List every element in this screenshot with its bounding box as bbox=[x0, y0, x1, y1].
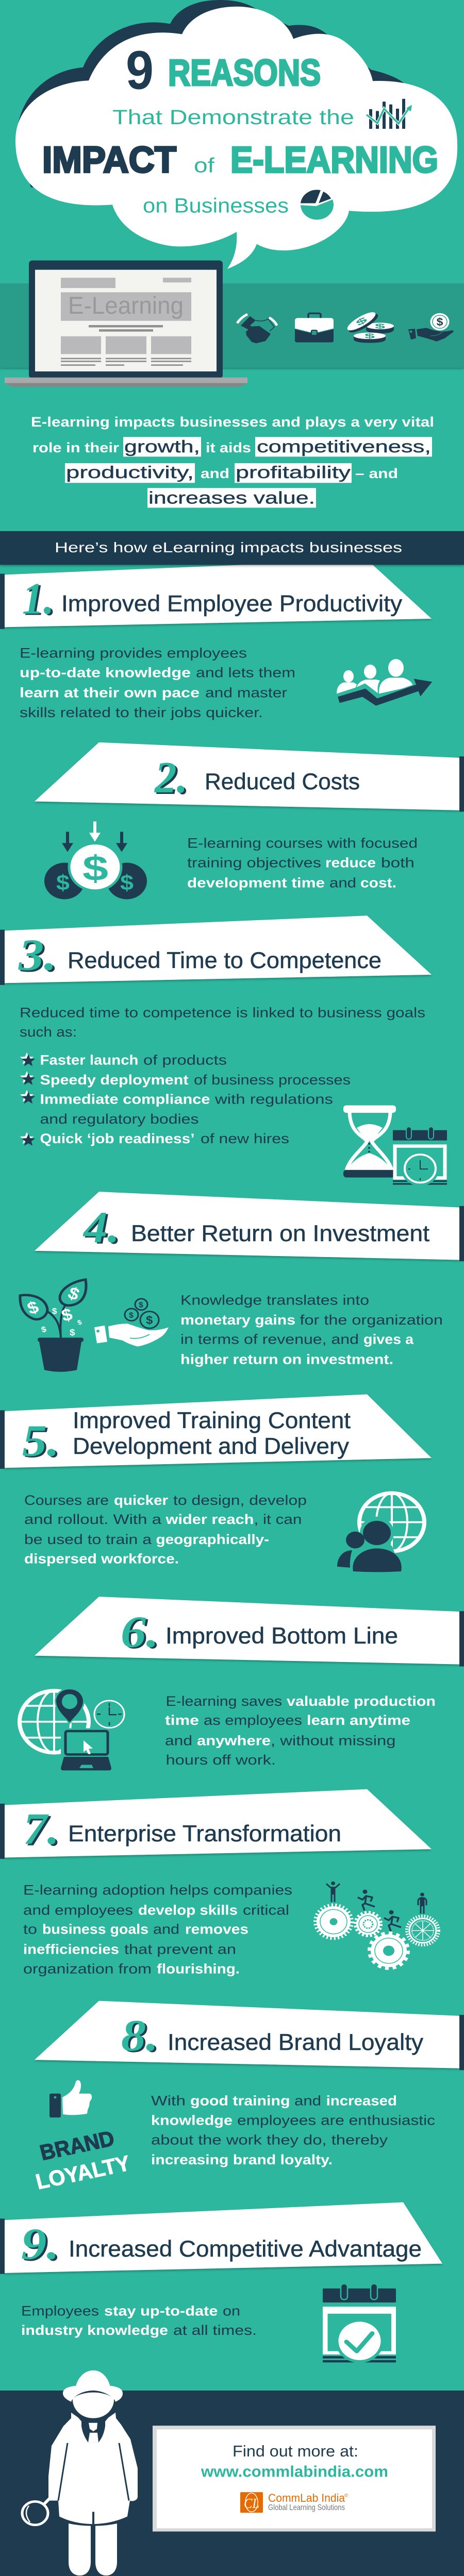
section 9 ribbon bbox=[0, 2202, 442, 2274]
list item: faster launch: Faster launch bbox=[40, 1053, 139, 1068]
list item: speedy deployment bbox=[20, 1071, 351, 1088]
section 8 text: about the work they do, thereby bbox=[151, 2132, 388, 2148]
icon: money plant: $ bbox=[25, 1298, 41, 1318]
section 4 text: in terms of revenue, and bbox=[180, 1332, 359, 1347]
icon: globe, pin, clock, laptop bbox=[20, 1689, 124, 1773]
list item: immediate compliance bbox=[20, 1090, 333, 1127]
brand stamp text bbox=[34, 2126, 132, 2194]
section 7 text: E-learning adoption helps companies bbox=[23, 1882, 292, 1898]
icon: money plant: $ bbox=[59, 1305, 75, 1326]
icon: coins: $ bbox=[375, 323, 386, 330]
heading 2: Reduced Costs bbox=[205, 769, 360, 794]
heading 5: Development and Delivery bbox=[73, 1433, 350, 1459]
section 3 text: Reduced time to competence is linked to business goals bbox=[20, 1005, 425, 1021]
section 7 text: organization from bbox=[23, 1961, 152, 1977]
laptop: E-Learning bbox=[68, 292, 184, 319]
section 4 text: Knowledge translates into bbox=[180, 1293, 369, 1308]
section 5 text: and rollout. With a bbox=[24, 1512, 161, 1528]
number 8: 8. bbox=[121, 2010, 158, 2060]
number 4: 4. bbox=[85, 1204, 122, 1253]
section 2 text: and bbox=[329, 875, 356, 891]
icon: reduced money: $ bbox=[82, 849, 108, 888]
section 4 text: gives a bbox=[363, 1332, 414, 1347]
section 8 text: knowledge bbox=[151, 2113, 233, 2128]
section 3 text: such as: bbox=[20, 1024, 77, 1040]
icon: hand with coins: $ bbox=[139, 1301, 143, 1309]
section 6 text: learn anytime bbox=[307, 1713, 410, 1728]
icon: people on rising arrow bbox=[337, 659, 433, 706]
section 4 text bbox=[180, 1293, 443, 1367]
section 5 ribbon bbox=[0, 1394, 432, 1469]
cloud shadow bbox=[16, 0, 404, 188]
section 4 text: higher return on investment. bbox=[180, 1351, 393, 1367]
section 5 text: , it can bbox=[254, 1512, 302, 1528]
section 7 ribbon bbox=[0, 1789, 432, 1859]
section 7 text: business goals bbox=[42, 1922, 148, 1937]
section 9 text: at all times. bbox=[173, 2323, 257, 2338]
section 6 text: and bbox=[165, 1733, 192, 1749]
title text bbox=[42, 41, 438, 217]
section 2 text: cost. bbox=[360, 875, 396, 891]
intro paragraph bbox=[31, 414, 434, 507]
section 8 text: increased bbox=[326, 2093, 397, 2109]
section 9 text: on bbox=[223, 2303, 240, 2319]
intro paragraph: competitiveness, bbox=[257, 437, 431, 456]
icon: coins: $ bbox=[364, 332, 376, 340]
section 7 text: flourishing. bbox=[157, 1961, 240, 1977]
heading 5: Improved Training Content bbox=[73, 1408, 351, 1433]
icon: hourglass bbox=[343, 1105, 396, 1177]
icon: money plant: $ bbox=[52, 1307, 57, 1316]
section 8 text: good training bbox=[190, 2093, 290, 2109]
section 6 text: , without missing bbox=[271, 1733, 396, 1749]
number 2: 2. bbox=[156, 754, 190, 804]
footer bbox=[0, 2370, 464, 2576]
section 5 text bbox=[24, 1493, 307, 1567]
section 5 text: dispersed workforce. bbox=[24, 1551, 179, 1567]
intro paragraph: increases value. bbox=[148, 488, 315, 507]
list item: immediate compliance: Immediate compliance bbox=[40, 1092, 210, 1107]
section 5 text: geographically- bbox=[156, 1532, 269, 1547]
number 1: 1. bbox=[22, 573, 54, 623]
intro paragraph: profitability bbox=[236, 463, 351, 482]
section 9 text: Employees bbox=[21, 2303, 99, 2319]
subtitle bar: Here’s how eLearning impacts businesses bbox=[55, 539, 402, 555]
icon: hand with coins bbox=[94, 1299, 169, 1347]
section 1 text: and lets them bbox=[196, 665, 295, 681]
heading 9: Increased Competitive Advantage bbox=[69, 2236, 422, 2262]
number 2: 2. bbox=[154, 752, 188, 802]
section 7 text: removes bbox=[185, 1922, 248, 1937]
section 1 text bbox=[20, 646, 295, 720]
section 4 ribbon bbox=[35, 1192, 464, 1261]
list item: job readiness: Quick ‘job readiness’ bbox=[40, 1131, 195, 1147]
section 9 text: industry knowledge bbox=[21, 2323, 168, 2338]
list item: speedy deployment: of business processes bbox=[194, 1072, 351, 1088]
section 7 text: develop skills bbox=[138, 1903, 238, 1918]
logo: CommLab India bbox=[268, 2492, 345, 2504]
icon: bar chart bbox=[367, 99, 412, 129]
logo: CL bbox=[244, 2496, 259, 2512]
section 6 text: as employees bbox=[204, 1713, 302, 1728]
number 9: 9. bbox=[21, 2219, 59, 2269]
logo bbox=[240, 2492, 348, 2513]
logo: Global Learning Solutions bbox=[268, 2503, 345, 2512]
cloud body bbox=[15, 7, 457, 269]
logo: © bbox=[344, 2493, 348, 2498]
section 7 text: to bbox=[23, 1922, 37, 1937]
section 2 text: E-learning courses with focused bbox=[187, 836, 418, 851]
number 8: 8. bbox=[123, 2012, 160, 2062]
number 5: 5. bbox=[24, 1417, 61, 1467]
list item: faster launch: of products bbox=[143, 1053, 227, 1068]
section 7 text: that prevent an bbox=[124, 1941, 236, 1957]
number 7: 7. bbox=[23, 1804, 59, 1854]
icon: briefcase bbox=[295, 313, 334, 343]
section 4 text: for the organization bbox=[300, 1312, 443, 1328]
title text: That Demonstrate the bbox=[112, 106, 354, 128]
number 3: 3. bbox=[20, 931, 59, 981]
icon: calendar with check bbox=[323, 2284, 396, 2363]
icon: hand with coins: $ bbox=[146, 1314, 153, 1327]
icon: money plant: $ bbox=[65, 1283, 82, 1304]
icon: pie chart bbox=[301, 190, 334, 219]
title text: REASONS bbox=[168, 52, 321, 93]
section 7 text bbox=[23, 1882, 292, 1977]
section 8 text: increasing brand loyalty. bbox=[151, 2152, 333, 2168]
icon: money plant: $ bbox=[76, 1318, 83, 1327]
section 6 ribbon bbox=[35, 1597, 464, 1667]
call to action box: www.commlabindia.com bbox=[201, 2463, 388, 2480]
list item: immediate compliance: with regulations bbox=[214, 1092, 333, 1107]
section 1 text: and master bbox=[205, 685, 287, 701]
section 5 text: to design, develop bbox=[173, 1493, 307, 1509]
section 6 text: time bbox=[165, 1713, 199, 1728]
heading 4: Better Return on Investment bbox=[131, 1221, 429, 1246]
number 6: 6. bbox=[123, 1608, 161, 1658]
subtitle bar bbox=[0, 531, 464, 565]
title text: on Businesses bbox=[143, 194, 289, 217]
icon: money plant bbox=[20, 1280, 86, 1372]
section 9 text bbox=[21, 2303, 257, 2338]
laptop bbox=[5, 260, 247, 387]
title text: IMPACT bbox=[42, 139, 176, 180]
section 2 ribbon bbox=[35, 742, 464, 811]
call to action box: Find out more at: bbox=[233, 2443, 358, 2460]
section 7 text: and employees bbox=[23, 1903, 133, 1918]
icon: handshake bbox=[237, 314, 277, 343]
title text: of bbox=[194, 154, 214, 177]
heading 8: Increased Brand Loyalty bbox=[168, 2029, 424, 2055]
section 3 text bbox=[20, 1005, 425, 1147]
list item: immediate compliance: and regulatory bodies bbox=[40, 1111, 199, 1127]
section 1 text: skills related to their jobs quicker. bbox=[20, 705, 263, 720]
list item: job readiness bbox=[20, 1131, 289, 1147]
section 5 text: be used to train a bbox=[24, 1532, 152, 1547]
section 2 text bbox=[187, 836, 418, 891]
heading 7: Enterprise Transformation bbox=[68, 1821, 341, 1846]
icon: gears and people bbox=[316, 1882, 439, 1968]
section 1 text: learn at their own pace bbox=[20, 685, 200, 701]
section 6 text bbox=[165, 1693, 436, 1768]
heading 3: Reduced Time to Competence bbox=[68, 947, 382, 973]
screen content bbox=[61, 278, 191, 354]
icon: reduced money bbox=[44, 822, 147, 899]
gears bbox=[316, 1905, 439, 1968]
section 8 text: and bbox=[294, 2093, 321, 2109]
intro paragraph: it aids bbox=[206, 440, 251, 456]
section 8 text: With bbox=[151, 2093, 186, 2109]
section 6 text: hours off work. bbox=[166, 1752, 276, 1768]
section 6 text: valuable production bbox=[287, 1693, 436, 1709]
section 2 text: both bbox=[381, 855, 415, 871]
section 2 text: development time bbox=[187, 875, 325, 891]
icon: money plant: $ bbox=[70, 1328, 75, 1337]
call to action box bbox=[153, 2426, 436, 2532]
section 8 ribbon bbox=[35, 2001, 464, 2070]
section 7 text: inefficiencies bbox=[23, 1941, 119, 1957]
icon: hand holding coin bbox=[408, 313, 454, 342]
brand stamp text: BRAND bbox=[38, 2126, 117, 2165]
icon: coins bbox=[345, 309, 394, 343]
number 3: 3. bbox=[18, 930, 57, 980]
intro paragraph: growth, bbox=[124, 437, 200, 456]
number 1: 1. bbox=[24, 575, 56, 625]
header band bbox=[0, 283, 464, 368]
brand stamp text: LOYALTY bbox=[34, 2151, 132, 2194]
heading 5 bbox=[73, 1408, 351, 1459]
section 1 text: E-learning provides employees bbox=[20, 646, 247, 661]
intro paragraph: – and bbox=[355, 466, 398, 482]
detective figure bbox=[22, 2370, 138, 2575]
number 7: 7. bbox=[25, 1805, 61, 1855]
section 6 text: E-learning saves bbox=[166, 1693, 282, 1709]
figures bbox=[326, 1882, 426, 1931]
section 3 ribbon bbox=[0, 916, 432, 985]
section 4 text: monetary gains bbox=[180, 1312, 295, 1328]
section 6 text: anywhere bbox=[197, 1733, 271, 1749]
number 6: 6. bbox=[121, 1606, 159, 1656]
intro paragraph: productivity, bbox=[66, 463, 194, 482]
section 9 text: stay up-to-date bbox=[104, 2303, 218, 2319]
icon: coins: $ bbox=[354, 315, 369, 328]
section 1 text: up-to-date knowledge bbox=[20, 665, 191, 681]
section 7 text: critical bbox=[243, 1903, 289, 1918]
title cloud bbox=[15, 0, 457, 269]
number 5: 5. bbox=[22, 1415, 59, 1465]
section 2 text: reduce bbox=[325, 855, 376, 871]
section 5 text: wider reach bbox=[165, 1512, 254, 1528]
icon: thumbs up and brand loyalty stamp bbox=[34, 2080, 132, 2194]
icon: money plant: $ bbox=[40, 1325, 47, 1334]
section 8 text bbox=[151, 2093, 435, 2168]
section 5 text: Courses are bbox=[24, 1493, 109, 1509]
icon: globe and people bbox=[335, 1493, 424, 1574]
number 9: 9. bbox=[23, 2220, 61, 2270]
heading 6: Improved Bottom Line bbox=[165, 1623, 398, 1649]
section 1 ribbon bbox=[0, 560, 432, 629]
icon: hand with coins: $ bbox=[129, 1311, 134, 1319]
list item: speedy deployment: Speedy deployment bbox=[40, 1072, 189, 1088]
icon: calendar clock bbox=[393, 1127, 447, 1186]
list item: job readiness: of new hires bbox=[201, 1131, 289, 1147]
heading 1: Improved Employee Productivity bbox=[61, 590, 403, 616]
section 2 text: training objectives bbox=[187, 855, 321, 871]
number 4: 4. bbox=[82, 1202, 120, 1252]
intro paragraph: and bbox=[201, 466, 229, 482]
section 8 text: employees are enthusiastic bbox=[237, 2113, 435, 2128]
section 7 text: and bbox=[153, 1922, 179, 1937]
title text: 9 bbox=[126, 41, 154, 101]
intro paragraph: E-learning impacts businesses and plays a very vital bbox=[31, 414, 434, 430]
list item: faster launch bbox=[20, 1053, 227, 1068]
icon: reduced money: $ bbox=[56, 871, 70, 895]
section 5 text: quicker bbox=[114, 1493, 168, 1509]
icon: hand holding coin: $ bbox=[437, 316, 443, 328]
intro paragraph: role in their bbox=[32, 440, 119, 456]
icon: reduced money: $ bbox=[120, 871, 134, 895]
